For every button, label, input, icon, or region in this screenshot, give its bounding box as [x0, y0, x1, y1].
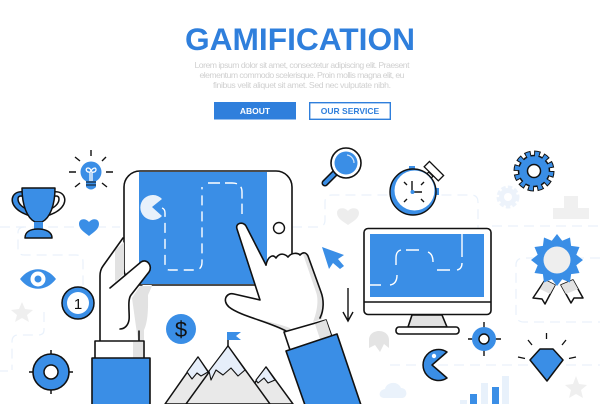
icon: faint ghost — [369, 331, 389, 352]
intro paragraph — [194, 60, 410, 90]
title: GAMIFICATION — [185, 22, 415, 57]
icon: faint gear — [499, 188, 517, 206]
icon: stopwatch — [390, 161, 444, 215]
icon: faint podium — [553, 196, 589, 219]
icon: target — [29, 350, 73, 394]
icon: heart — [79, 219, 99, 236]
icon: pacman — [423, 350, 447, 380]
background dashed paths — [0, 195, 600, 371]
mountains with flag — [165, 332, 293, 404]
icon: light bulb — [69, 150, 113, 190]
down arrow — [343, 288, 353, 321]
icon: faint cloud — [380, 383, 406, 398]
icon: cursor arrow — [322, 247, 344, 269]
right hand — [225, 223, 326, 336]
icon: faint star — [11, 302, 33, 322]
bar chart — [460, 376, 509, 404]
maze path on tablet — [162, 183, 242, 270]
icon: faint heart — [337, 208, 359, 225]
icon: gear — [518, 154, 550, 188]
right sleeve — [284, 320, 362, 404]
left hand — [100, 238, 152, 341]
icon: small target — [468, 322, 501, 356]
intro paragraph: elementum commodo scelerisque. Proin mollis magna elit, eu — [200, 70, 405, 80]
icon: award rosette — [531, 234, 583, 304]
button: our service — [310, 103, 390, 119]
icon: dollar coin: $ — [175, 317, 187, 342]
button: about: ABOUT — [240, 106, 271, 116]
tablet — [124, 171, 292, 285]
icon: number one badge — [62, 287, 94, 319]
icon: eye — [20, 269, 56, 289]
button: our service: OUR SERVICE — [321, 106, 380, 116]
icon: diamond — [518, 333, 576, 381]
button: about — [214, 102, 296, 120]
icon: trophy — [12, 188, 65, 238]
monitor — [364, 228, 491, 334]
icon: magnifier — [325, 148, 361, 183]
intro paragraph: Lorem ipsum dolor sit amet, consectetur adipiscing elit. Praesent — [194, 60, 410, 70]
pacman on tablet — [140, 195, 162, 220]
left sleeve — [92, 341, 150, 404]
icon: faint star right — [565, 376, 587, 398]
icon: number one badge: 1 — [74, 296, 82, 313]
maze path on monitor — [370, 234, 462, 285]
intro paragraph: finibus velit aliquet sit amet. Sed nec vulputate nibh. — [213, 80, 391, 90]
icon: dollar coin — [166, 314, 196, 344]
